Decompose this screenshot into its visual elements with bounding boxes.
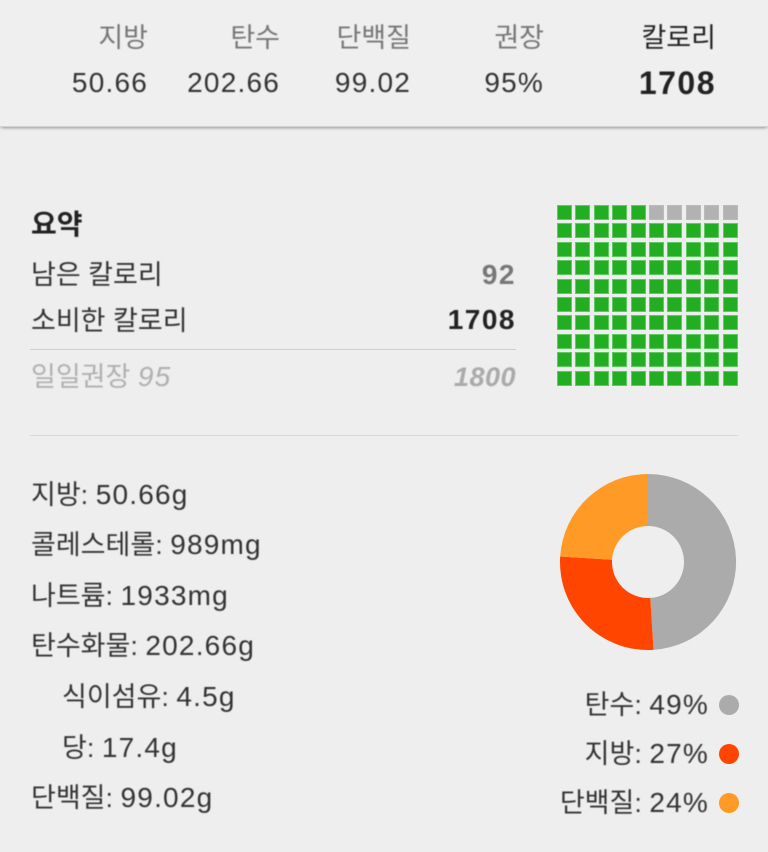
header column: protein (335, 23, 411, 98)
sodium: 나트륨: 1933mg (31, 580, 229, 611)
cholesterol: 콜레스테롤: 989mg (31, 529, 262, 560)
carbohydrates: 탄수화물: 202.66g (31, 630, 255, 661)
legend: protein: 단백질: 24% (560, 787, 709, 818)
header column: carbs: 202.66 (187, 67, 280, 98)
remaining calories label: 남은 칼로리 (31, 260, 163, 290)
fat slice 27% (560, 556, 654, 650)
carbs slice 49% (648, 474, 736, 650)
fat: 지방: 50.66g (31, 479, 189, 510)
protein: 단백질: 99.02g (31, 782, 213, 813)
waffle chart: 95 of 100 squares (557, 205, 738, 386)
header column: calories (639, 23, 716, 101)
header column: carbs (187, 23, 280, 98)
remaining calories value: 92 (482, 259, 516, 290)
daily recommendation value: 1800 (454, 362, 516, 392)
summary panel (30, 209, 516, 392)
header column: carbs: 탄수 (230, 23, 280, 53)
header column: calories: 칼로리 (641, 23, 716, 53)
header bar (0, 0, 768, 127)
legend: carbs: 탄수: 49% (585, 689, 709, 720)
consumed calories value: 1708 (448, 304, 516, 335)
daily recommendation label: 일일권장 95 (31, 361, 171, 392)
header column: fat: 지방 (98, 23, 148, 53)
header column: protein: 99.02 (335, 67, 411, 98)
header column: fat: 50.66 (72, 67, 148, 98)
header column: calories: 1708 (639, 65, 716, 101)
header column: recommended: 권장 (494, 23, 544, 53)
nutrient list (31, 479, 262, 814)
header column: fat (72, 23, 148, 98)
protein slice 24% (560, 474, 648, 560)
header column: recommended: 95% (484, 67, 544, 98)
header column: protein: 단백질 (336, 23, 411, 53)
consumed calories label: 소비한 칼로리 (31, 306, 188, 336)
header column: recommended (484, 23, 544, 98)
summary heading: 요약 (31, 209, 83, 240)
donut chart (560, 474, 736, 650)
fiber: 식이섬유: 4.5g (62, 681, 236, 712)
sugar: 당: 17.4g (62, 732, 178, 763)
legend: fat: 지방: 27% (585, 738, 709, 769)
donut legend (560, 689, 739, 818)
